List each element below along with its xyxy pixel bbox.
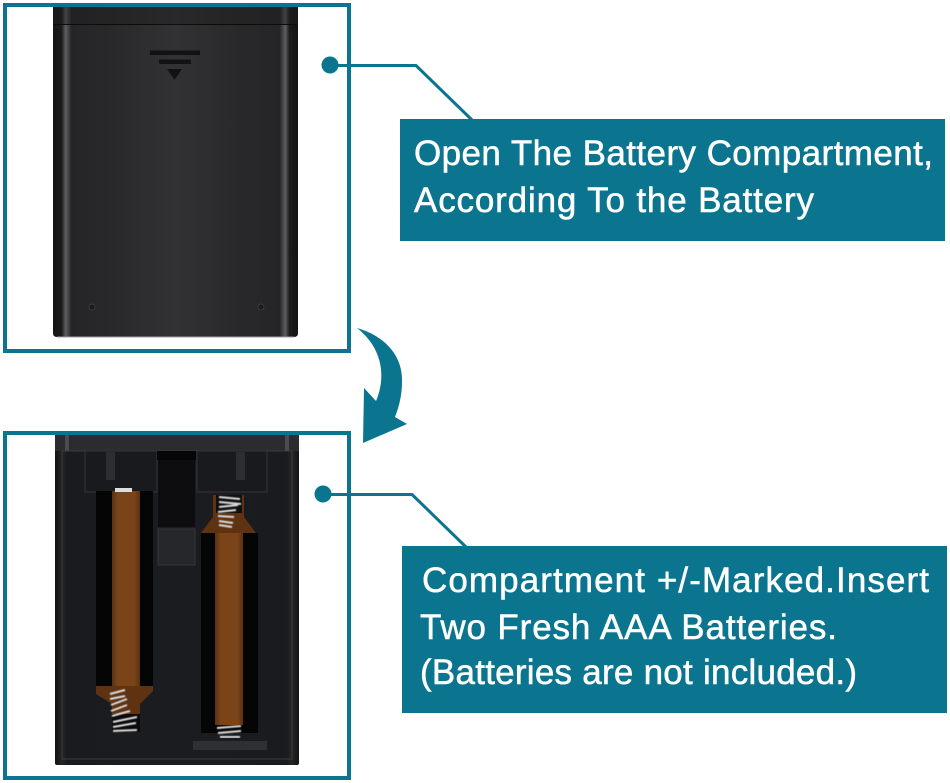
callout: insert batteries: Two Fresh AAA Batteries. (420, 608, 837, 647)
panel: open battery compartment (5, 433, 349, 778)
callout: insert batteries (402, 546, 947, 713)
remote back open (55, 433, 299, 765)
panel: closed battery cover (5, 5, 349, 351)
battery slot: left (96, 488, 153, 732)
callout: open compartment: According To the Battery (414, 181, 814, 220)
callout: insert batteries: (Batteries are not included.) (420, 653, 857, 692)
callout connector: bottom (314, 486, 466, 547)
callout: open compartment: Open The Battery Compartment, (414, 134, 933, 173)
battery slot: right (193, 495, 267, 750)
spring (110, 690, 137, 731)
callout: open compartment (400, 119, 945, 241)
callout connector: top (322, 56, 472, 120)
icon: open latch marker (150, 50, 200, 80)
callout: insert batteries: Compartment +/-Marked.Insert (422, 561, 929, 600)
remote back closed (53, 7, 298, 338)
latch slot (157, 451, 196, 565)
arrow: curved step arrow (357, 328, 407, 443)
